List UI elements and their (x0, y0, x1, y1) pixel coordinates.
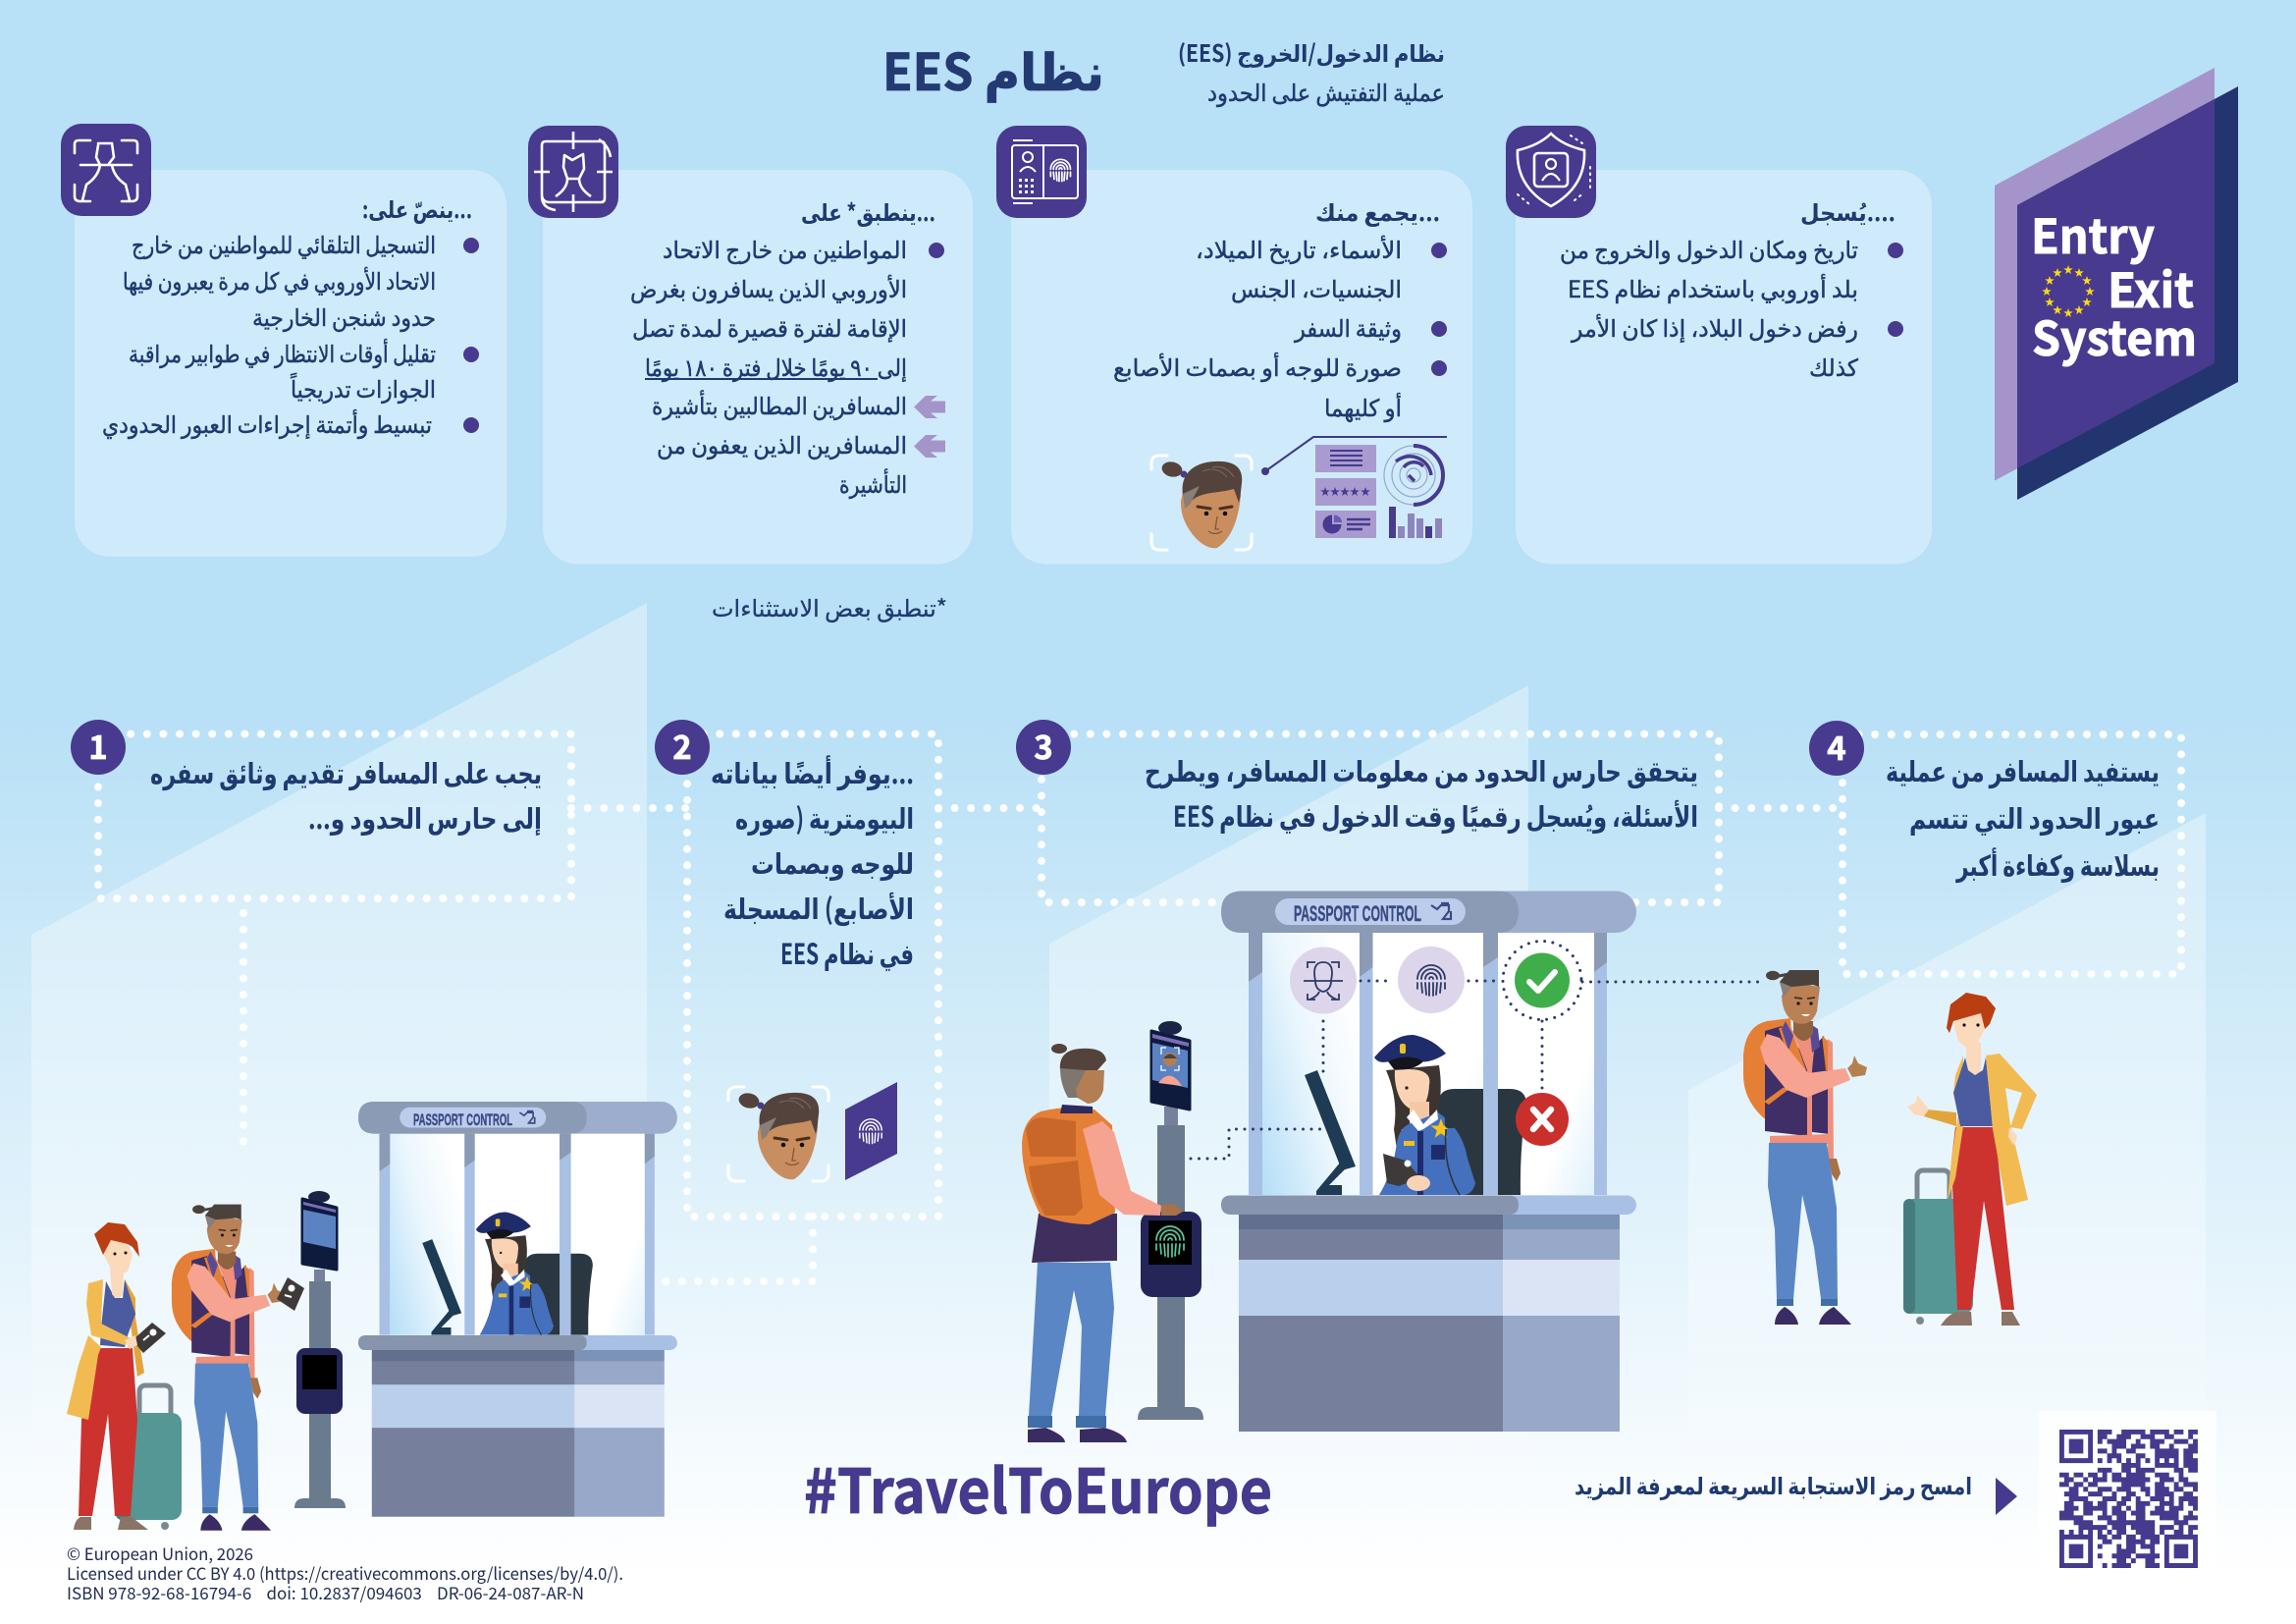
panel: collects: أو كليهما (1324, 389, 1402, 423)
panel: collects: الأسماء، تاريخ الميلاد، (1196, 231, 1402, 265)
step 1: إلى حارس الحدود و... (308, 796, 542, 838)
traveller woman (1903, 993, 2037, 1326)
logo: Entry Exit System (1995, 68, 2238, 500)
step 2: البيومترية (صوره (735, 796, 914, 838)
panel: records: رفض دخول البلاد، إذا كان الأمر (1571, 309, 1858, 344)
arrow: to QR code (1996, 1478, 2017, 1515)
step 1: 1 (88, 722, 108, 769)
panel: records (1516, 170, 1932, 564)
man with backpack (172, 1205, 286, 1531)
icon: fingerprint card (845, 1082, 897, 1180)
icon: fingerprint check (1398, 947, 1465, 1013)
illustration: face (728, 1087, 828, 1181)
step 2: ...يوفر أيضًا بياناته (711, 751, 914, 792)
arrow: visa exempt (914, 435, 945, 458)
illustration: large passport booth (1191, 892, 1765, 1432)
step 4 (1809, 721, 2160, 885)
copyright footer: ISBN 978-92-68-16794-6 doi: 10.2837/094603 DR-06-24-087-AR-N (67, 1580, 584, 1604)
copyright footer: Licensed under CC BY 4.0 (https://creativecommons.org/licenses/by/4.0/). (67, 1560, 623, 1585)
arrow: visa required (914, 396, 945, 418)
icon: approved check (1503, 941, 1581, 1019)
step 4: 4 (1827, 723, 1846, 770)
illustration: small passport booth (358, 1102, 677, 1517)
step 3 (1016, 720, 1698, 836)
subtitle: عملية التفتيش على الحدود (1207, 74, 1445, 108)
panel: objectives: التسجيل التلقائي للمواطنين من خارج (132, 226, 436, 260)
QR code (2039, 1411, 2216, 1586)
step 4: يستفيد المسافر من عملية (1886, 749, 2160, 790)
step 1 (71, 720, 542, 838)
illustration: biometric data (1261, 437, 1447, 538)
logo: Entry Exit System: System (2032, 300, 2197, 369)
panel: collects (1011, 170, 1472, 564)
panel: records: ....يُسجل (1800, 193, 1896, 228)
illustration: small kiosk (294, 1191, 346, 1508)
panel: records: كذلك (1809, 349, 1859, 383)
guard passport (1383, 1154, 1430, 1191)
panel: applies to: ...ينطبق* على (801, 193, 935, 228)
hashtag: #TravelToEurope (804, 1442, 1272, 1531)
copyright footer (67, 1541, 623, 1604)
illustration: travellers talking (1743, 970, 2037, 1326)
traveller man (1743, 970, 1867, 1325)
copyright footer: © European Union, 2026 (67, 1541, 253, 1565)
logo: Entry Exit System: Entry (2031, 198, 2155, 267)
panel: objectives: ...ينصّ على: (362, 190, 472, 225)
illustration: left travellers (67, 1205, 304, 1531)
panel: records: بلد أوروبي باستخدام نظام EES (1568, 270, 1858, 304)
title: نظام EES (882, 31, 1104, 105)
passport (277, 1277, 304, 1311)
panel: applies to (543, 170, 973, 564)
panel: collects: وثيقة السفر (1294, 309, 1402, 344)
step 3: يتحقق حارس الحدود من معلومات المسافر، ويطرح (1145, 749, 1698, 790)
QR prompt text: امسح رمز الاستجابة السريعة لمعرفة المزيد (1575, 1467, 1972, 1501)
dotted flow paths (98, 734, 2181, 1281)
panel: applies to: الأوروبي الذين يسافرون بغرض (630, 270, 907, 304)
step 2: في نظام EES (780, 932, 914, 973)
step 4: بسلاسة وكفاءة أكبر (1955, 843, 2160, 885)
step 2: 2 (672, 722, 692, 769)
illustration: small passport booth: PASSPORT CONTROL (413, 1110, 512, 1129)
icon: passport and fingerprint (996, 126, 1087, 218)
panel: objectives: تبسيط وأتمتة إجراءات العبور الحدودي (102, 406, 432, 440)
footnote: *تنطبق بعض الاستثناءات (712, 589, 947, 623)
step 4: عبور الحدود التي تتسم (1909, 796, 2160, 838)
step 2: الأصابع) المسجلة (723, 887, 914, 928)
panel: records: تاريخ ومكان الدخول والخروج من (1560, 231, 1858, 265)
step 2 (655, 720, 914, 1181)
dotted connectors (1191, 981, 1765, 1159)
icon: rejected cross (1516, 1093, 1569, 1146)
panel: collects: صورة للوجه أو بصمات الأصابع (1113, 349, 1402, 383)
panel: objectives: الاتحاد الأوروبي في كل مرة يعبرون فيها (123, 262, 436, 297)
panel: objectives (75, 170, 507, 557)
icon: face check (1290, 947, 1357, 1013)
panel: objectives: تقليل أوقات الانتظار في طوابير مراقبة (129, 335, 436, 369)
logo: Entry Exit System: Exit (2108, 252, 2194, 321)
panel: collects: ...يجمع منك (1315, 193, 1440, 228)
panel: objectives: حدود شنجن الخارجية (252, 298, 436, 333)
icon: shield (1506, 126, 1596, 218)
illustration: face scan (1151, 456, 1252, 550)
panel: applies to: المسافرين المطالبين بتأشيرة (652, 387, 907, 421)
subtitle: نظام الدخول/الخروج (EES) (1178, 34, 1445, 69)
panel: applies to: المسافرين الذين يعفون من (657, 426, 907, 460)
icon: target face (528, 126, 618, 218)
panel: applies to: التأشيرة (839, 465, 907, 500)
step 3: 3 (1034, 722, 1053, 769)
step 3: الأسئلة، ويُسجل رقميًا وقت الدخول في نظام EES (1173, 794, 1698, 836)
step 2: للوجه وبصمات (751, 841, 914, 883)
panel: objectives: الجوازات تدريجياً (290, 370, 436, 405)
panel: applies to: إلى ٩٠ يومًا خلال فترة ١٨٠ يومًا (645, 349, 907, 383)
panel: applies to: المواطنين من خارج الاتحاد (663, 231, 907, 265)
step 1: يجب على المسافر تقديم وثائق سفره (150, 751, 542, 792)
illustration: large passport booth: PASSPORT CONTROL (1294, 901, 1421, 926)
icon: face scan (61, 124, 151, 216)
subtitle (1178, 34, 1445, 108)
panel: applies to: الإقامة لفترة قصيرة لمدة تصل (632, 309, 907, 344)
panel: collects: الجنسيات، الجنس (1231, 270, 1402, 304)
illustration: large kiosk (1138, 1021, 1203, 1420)
woman with suitcase (67, 1222, 182, 1530)
illustration: traveller at kiosk (1022, 1044, 1183, 1442)
